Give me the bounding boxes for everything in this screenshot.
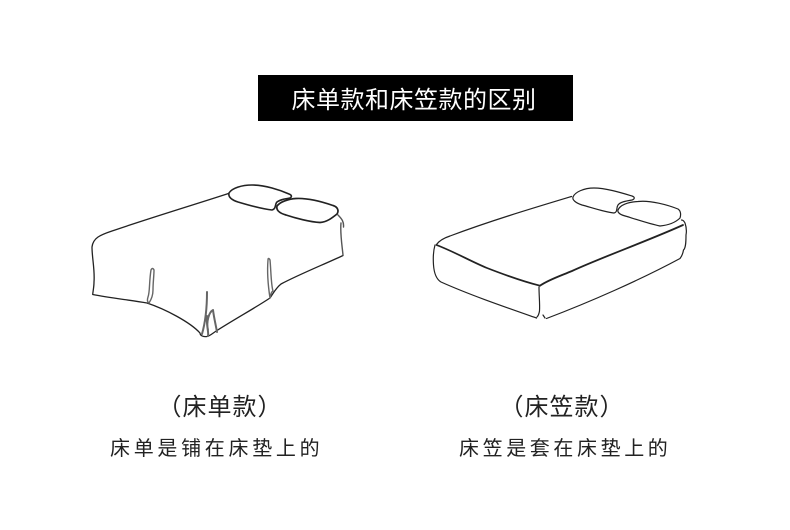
mattress top edge: [436, 196, 572, 244]
mattress right seam: [540, 225, 683, 286]
sheet outline: [92, 194, 343, 337]
illustration: fitted sheet bed: [433, 188, 686, 318]
pillow left: [229, 185, 291, 210]
label: sheet style: （床单款）: [158, 394, 282, 421]
title banner: 床单款和床笠款的区别: [292, 80, 536, 115]
mattress right side: [546, 220, 686, 318]
label: fitted style: （床笠款）: [500, 394, 624, 421]
pillow right: [618, 201, 681, 226]
title banner: [258, 75, 573, 121]
mattress front corner: [537, 287, 545, 318]
mattress left side: [433, 245, 536, 318]
description: sheet style: 床单是铺在床垫上的: [110, 438, 323, 460]
mattress front seam: [436, 245, 540, 286]
pillow right: [277, 198, 338, 222]
sheet right corner: [338, 215, 344, 255]
description: fitted style: 床笠是套在床垫上的: [459, 438, 671, 460]
sheet pleats: [147, 258, 273, 336]
pillow left: [573, 188, 634, 213]
